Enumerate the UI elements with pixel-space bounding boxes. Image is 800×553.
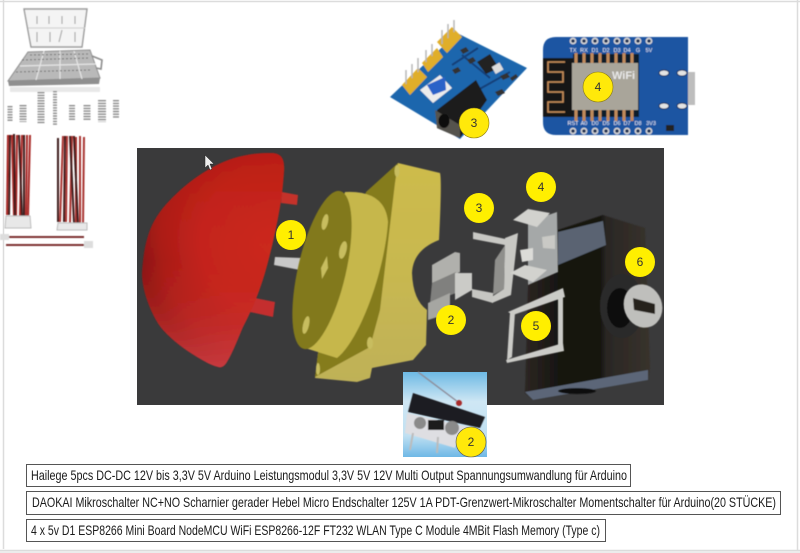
text box: power module: Hailege 5pcs DC-DC 12V bis 3,3V 5V Arduino Leistungsmodul 3,3V 5V 12V Multi Output Spannungsumwandlung für Arduino xyxy=(31,467,627,483)
red and black cable bundle left xyxy=(5,134,31,228)
callout 1: 1 xyxy=(288,228,295,242)
assortment box tray xyxy=(8,50,102,92)
antenna block xyxy=(543,58,573,117)
callout 4 on board: 4 xyxy=(595,80,602,94)
part 4 bracket xyxy=(528,212,558,285)
USB connector xyxy=(659,70,695,131)
black case xyxy=(525,215,650,400)
switch pins xyxy=(410,433,438,453)
pin labels: D6 xyxy=(613,121,621,127)
pin labels: 3V3 xyxy=(646,121,656,127)
pin labels: D3 xyxy=(613,48,621,54)
regulator and components xyxy=(452,47,518,96)
callout 5 xyxy=(521,311,551,341)
yellow housing xyxy=(280,163,441,382)
slide switch xyxy=(420,75,452,103)
red and black cable bundle right xyxy=(57,136,87,230)
callout 6: 6 xyxy=(637,255,644,269)
pin labels: D0 xyxy=(591,121,599,127)
board xyxy=(543,37,688,135)
callout 5: 5 xyxy=(533,319,540,333)
callout 6 xyxy=(625,247,655,277)
part 2 bracket xyxy=(432,252,460,283)
ESP module xyxy=(572,53,639,121)
image: microswitch photo xyxy=(403,372,487,457)
photo background xyxy=(403,372,487,457)
callout 1 xyxy=(276,220,306,250)
callout 3: 3 xyxy=(476,201,483,215)
callout 3 xyxy=(459,108,489,138)
callout 3: 3 xyxy=(471,116,478,130)
part 3 bracket xyxy=(473,232,510,246)
top and bottom pins xyxy=(570,38,652,134)
long cables with plugs xyxy=(0,234,93,248)
pin labels: D5 xyxy=(602,121,610,127)
pin labels: D2 xyxy=(602,48,610,54)
pin labels: D7 xyxy=(623,121,631,127)
text box: microswitch xyxy=(26,492,780,514)
loose springs xyxy=(10,91,116,125)
pin labels: A0 xyxy=(581,121,587,127)
pin labels: D1 xyxy=(591,48,599,54)
part 5 frame xyxy=(508,288,565,315)
pin labels: 5V xyxy=(646,48,653,54)
pin headers xyxy=(402,20,462,95)
red dome and pegs xyxy=(142,153,298,367)
microswitch holder parts xyxy=(428,209,565,363)
text box: power module xyxy=(26,464,630,486)
switch body xyxy=(408,393,485,428)
pin labels: TX xyxy=(569,48,577,54)
pin labels xyxy=(568,48,656,127)
image: spring assortment box and cables xyxy=(0,9,116,248)
pin labels: G xyxy=(636,48,640,54)
barrel jack xyxy=(435,80,487,138)
callout 2 xyxy=(436,305,466,335)
small white button part xyxy=(274,257,302,270)
pin labels: D4 xyxy=(623,48,631,54)
callout 4: 4 xyxy=(538,180,545,194)
callout 3 xyxy=(464,193,494,223)
switch lever xyxy=(418,372,458,402)
text box: ESP8266 board xyxy=(26,520,606,542)
callout 4 xyxy=(526,172,556,202)
pin labels: D8 xyxy=(634,121,642,127)
pin labels: RST xyxy=(568,121,579,127)
callout 4 on board xyxy=(583,72,613,102)
callout 2 on photo: 2 xyxy=(468,435,475,449)
ESP module: WiFi xyxy=(612,70,635,82)
dark background xyxy=(137,148,664,405)
assortment box lid xyxy=(24,9,87,47)
rotary disc xyxy=(618,279,668,333)
image: DC-DC power module xyxy=(390,20,527,139)
callout 2: 2 xyxy=(448,313,455,327)
text box: ESP8266 board: 4 x 5v D1 ESP8266 Mini Board NodeMCU WiFi ESP8266-12F FT232 WLAN Type C Module 4MBit Flash Memory (Type c) xyxy=(31,522,600,538)
panel: exploded 3D view xyxy=(137,148,668,405)
image: D1 mini ESP8266 board xyxy=(543,37,695,135)
pin labels: RX xyxy=(580,48,588,54)
mouse cursor xyxy=(205,155,214,170)
module board xyxy=(390,33,527,139)
